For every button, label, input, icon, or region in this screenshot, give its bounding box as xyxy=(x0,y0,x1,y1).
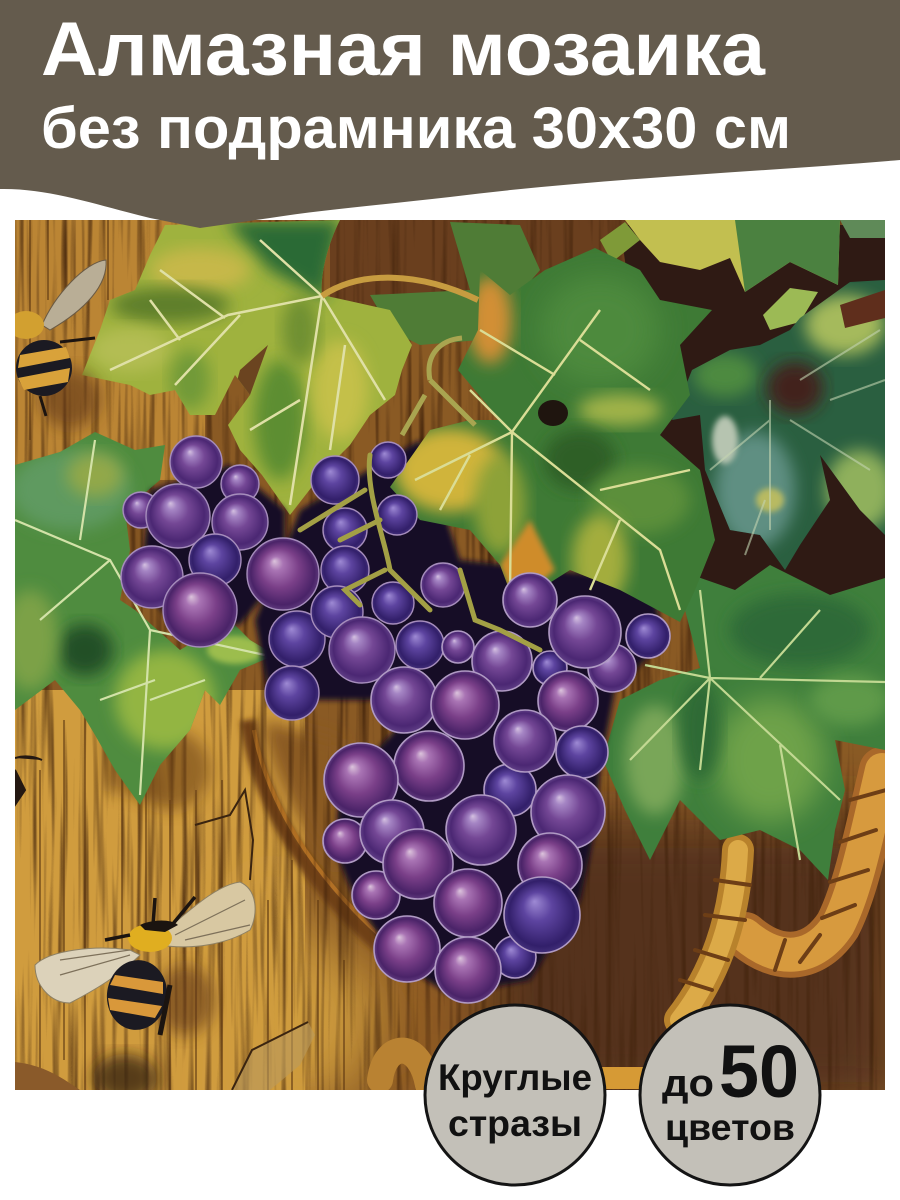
grape cluster main xyxy=(323,573,670,1003)
bee top left xyxy=(8,260,106,428)
wood background xyxy=(15,220,900,1110)
header banner xyxy=(0,0,900,228)
leaf: right bottom xyxy=(603,565,890,880)
rope right xyxy=(380,770,886,1085)
badge: up to 50 colours: до xyxy=(662,1063,714,1105)
badge: up to 50 colours: 50 xyxy=(719,1030,799,1113)
badge: round rhinestones xyxy=(425,1005,605,1185)
leaf: left green xyxy=(2,432,275,805)
grape cluster left xyxy=(121,436,465,720)
artwork: grapes on wood xyxy=(2,220,900,1110)
title: Алмазная мозаика xyxy=(41,7,766,92)
background leaf behind top-left xyxy=(370,222,540,345)
badge: up to 50 colours: цветов xyxy=(665,1107,795,1148)
badge: round rhinestones: стразы xyxy=(448,1103,582,1144)
leaf: top-left yellow green xyxy=(82,220,478,515)
grape stems xyxy=(300,455,540,650)
subtitle: без подрамника 30х30 см xyxy=(41,96,791,161)
dark background behind leaves xyxy=(620,225,885,600)
leaves top right xyxy=(600,220,885,330)
badge: up to 50 colours xyxy=(640,1005,820,1185)
dark shadow behind grapes xyxy=(140,440,665,995)
bee bottom left xyxy=(35,882,255,1035)
leaf: dark green right xyxy=(672,280,894,570)
badge: round rhinestones: Круглые xyxy=(438,1057,592,1098)
leaf: center large xyxy=(390,248,715,622)
